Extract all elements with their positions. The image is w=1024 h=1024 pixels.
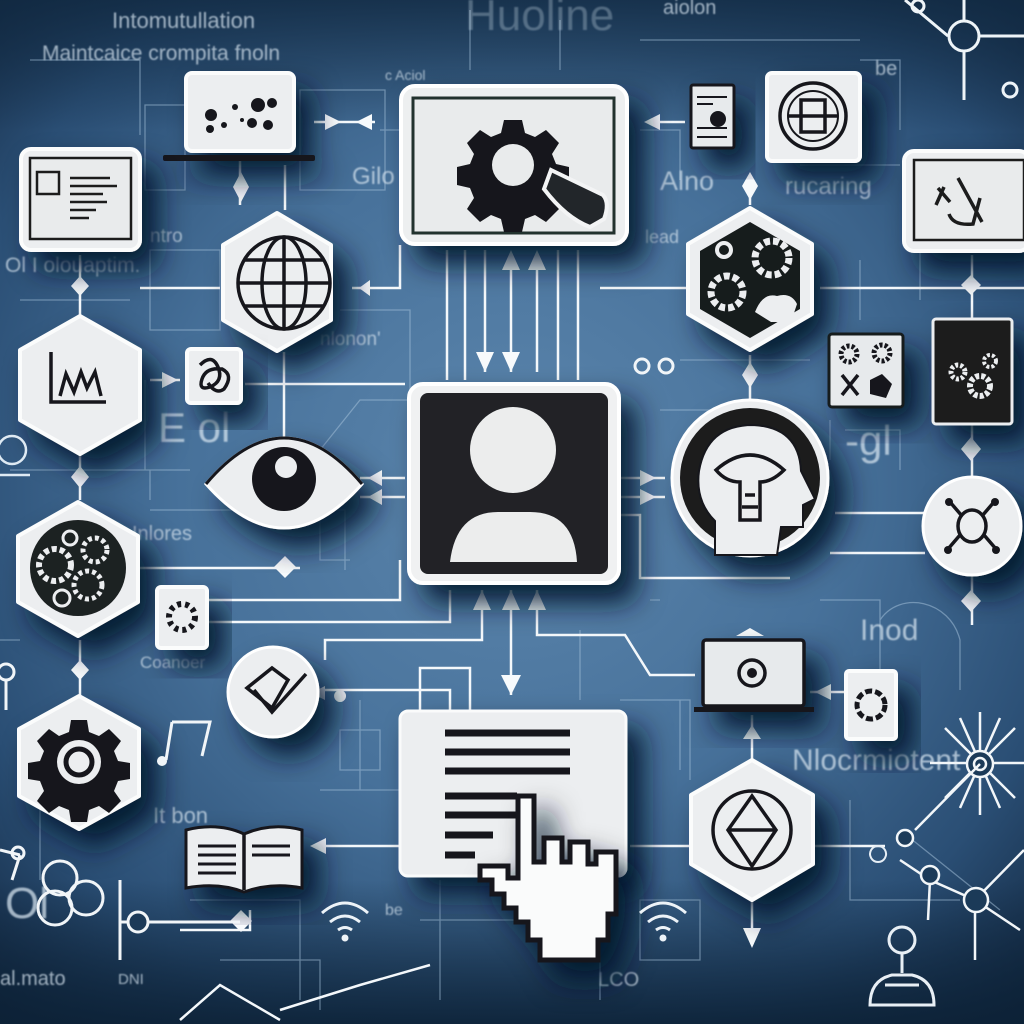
background text: Maintcaice crompita fnoln	[42, 42, 280, 65]
background text: c Aciol	[385, 67, 425, 83]
background text: Ol	[5, 879, 49, 928]
icon: gear hexagon	[19, 696, 139, 829]
icon: music note	[157, 722, 210, 766]
background text: al.mato	[0, 968, 66, 990]
background text: Inlores	[132, 523, 192, 545]
background text: It bon	[153, 803, 208, 828]
icon: wifi right	[640, 903, 686, 940]
panel: settings monitor	[401, 86, 627, 244]
panel: right monitor	[904, 151, 1024, 251]
background text: Coanoer	[140, 653, 206, 672]
icon: open book	[186, 827, 302, 892]
icon: eye	[206, 438, 362, 528]
icon: square symbols	[829, 334, 903, 407]
icon: gear	[457, 120, 569, 232]
background text: Ol I olouaptim.	[5, 254, 140, 277]
background text: lead	[645, 227, 679, 247]
icon: head profile	[672, 400, 828, 556]
icon: gears hexagon	[688, 208, 812, 350]
icon: wifi left	[322, 903, 368, 940]
icon: top right nodes	[905, 0, 1024, 100]
background text: -gl	[845, 417, 892, 464]
icon: diamond hexagon	[691, 760, 813, 900]
icon: gears hexagon left	[18, 502, 138, 636]
background text: nlonon'	[320, 329, 381, 350]
icon: check circle	[228, 647, 318, 737]
background text: be	[875, 58, 897, 80]
background text: Alno	[660, 166, 714, 196]
icon: small document	[691, 85, 734, 148]
icon: small card	[846, 671, 896, 739]
icon: small molecule card	[157, 587, 207, 648]
background text: LCO	[598, 969, 639, 991]
icon: circle network	[923, 477, 1021, 575]
background text: Gilo	[352, 163, 395, 190]
panel: text document	[400, 711, 626, 876]
panel: central user	[409, 384, 619, 583]
background text: E ol	[158, 404, 230, 451]
background text: Inod	[860, 614, 918, 647]
icon: pen	[544, 170, 607, 227]
icon: person badge	[870, 927, 934, 1005]
icon: globe hexagon	[223, 213, 331, 351]
icon: square with circle	[767, 73, 860, 161]
icon: left edge node	[0, 436, 30, 475]
icon: network star	[897, 712, 1024, 960]
background text: rucaring	[785, 173, 872, 200]
background text: Intomutullation	[112, 8, 255, 33]
icon: chart hexagon	[20, 316, 140, 454]
background text: DNI	[118, 971, 144, 988]
panel: laptop with dots	[163, 73, 315, 161]
panel: left monitor	[21, 149, 140, 250]
icon: hand cursor	[480, 796, 616, 960]
background text: Nlocrmiotent	[792, 744, 961, 777]
icon: small square knot	[187, 349, 241, 403]
icon: laptop camera	[694, 640, 814, 712]
background text: ntro	[150, 226, 183, 247]
background text: be	[385, 902, 403, 919]
icon: dark tablet with gears	[933, 319, 1012, 424]
icon: eyes pair	[635, 359, 673, 373]
icon: linked circles	[0, 664, 240, 960]
